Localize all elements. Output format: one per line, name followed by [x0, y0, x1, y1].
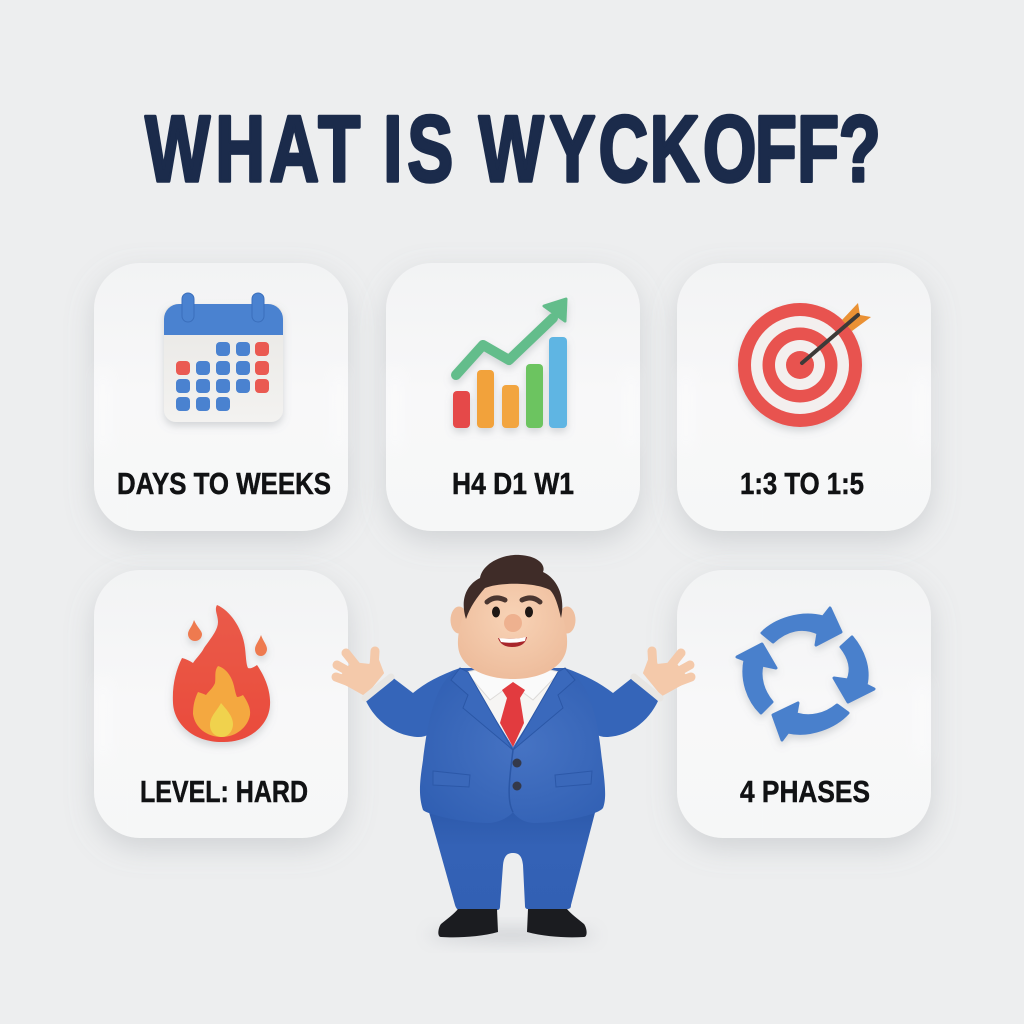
right shoe — [527, 909, 587, 937]
label: risk reward: 1:3 TO 1:5 — [740, 466, 864, 501]
label: days to weeks: DAYS TO WEEKS — [117, 466, 331, 501]
eyebrows — [487, 598, 540, 602]
left cuff — [365, 677, 391, 698]
hair — [464, 555, 562, 619]
right hand — [644, 651, 691, 695]
teeth — [499, 637, 526, 643]
left lapel — [451, 668, 513, 750]
icon: target with arrow — [738, 303, 871, 427]
left hand — [336, 651, 383, 695]
label: 4 phases: 4 PHASES — [740, 774, 870, 809]
head — [458, 578, 567, 679]
left shoe — [438, 909, 498, 937]
right sleeve — [565, 668, 658, 737]
left pocket — [433, 771, 470, 787]
icon: flame — [173, 605, 270, 742]
trousers — [427, 805, 597, 910]
label: level hard: LEVEL: HARD — [140, 774, 308, 809]
jacket — [420, 668, 605, 823]
icon: cycle arrows — [737, 608, 874, 740]
panel: 4 phases — [677, 570, 931, 838]
character: businessman — [336, 555, 691, 941]
collar — [466, 668, 560, 700]
left sleeve — [366, 668, 460, 737]
title: WHAT IS WYCKOFF? — [145, 98, 881, 202]
jacket front edge — [509, 750, 513, 812]
ears — [450, 606, 576, 634]
panel: risk reward — [677, 263, 931, 531]
shirt — [466, 672, 560, 747]
eyes — [492, 606, 533, 618]
panel: timeframes — [386, 263, 640, 531]
right pocket — [555, 771, 592, 787]
icon: growth bar chart — [453, 299, 567, 428]
panel: days to weeks — [94, 263, 348, 531]
icon: calendar — [164, 293, 283, 422]
right lapel — [513, 668, 575, 750]
label: timeframes: H4 D1 W1 — [452, 466, 574, 501]
nose — [504, 614, 522, 632]
right cuff — [634, 677, 660, 698]
mouth — [498, 637, 527, 647]
buttons — [512, 758, 522, 790]
panel: level hard — [94, 570, 348, 838]
tie — [500, 682, 525, 747]
